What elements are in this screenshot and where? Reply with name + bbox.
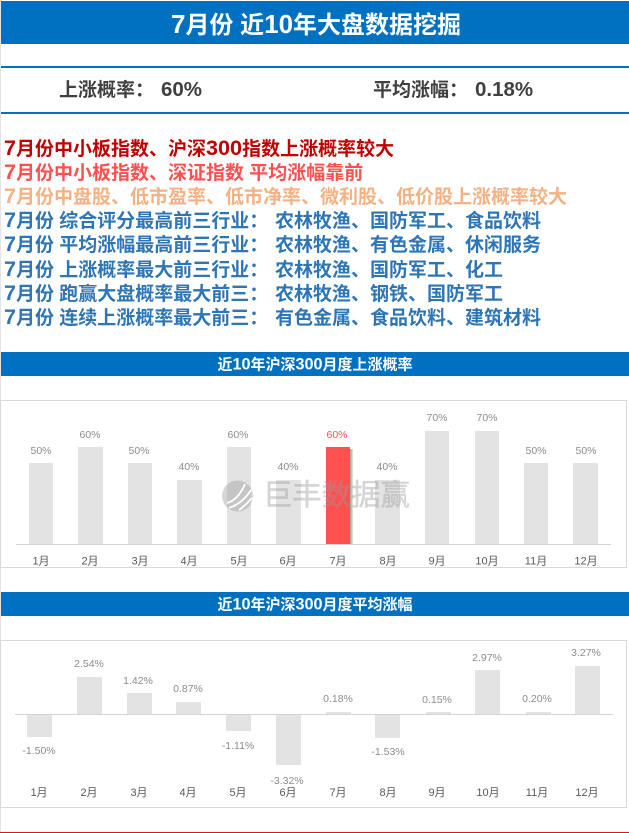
value labels: 0.20% [522,693,552,705]
bar chart: monthly average gain [0,640,626,808]
month labels: 5月 [230,556,248,568]
month labels: 5月 [229,787,247,799]
month labels: 2月 [80,787,98,799]
value labels: 50% [30,445,52,457]
value labels: 70% [476,412,498,424]
line: composite score: 7月份 综合评分最高前三行业： [4,207,268,232]
line: rise probability sectors: 农林牧渔、国防军工、化工 [275,258,503,281]
value labels: 0.87% [173,683,203,695]
month labels: 3月 [130,787,148,799]
month labels [32,556,598,568]
value labels: 1.42% [123,675,153,687]
value labels: 40% [178,461,200,473]
bar chart: monthly rise probability [0,400,626,568]
value labels: -1.11% [222,740,254,752]
month labels: 1月 [30,787,48,799]
line: average gain sectors: 农林牧渔、有色金属、休闲服务 [275,233,541,256]
month labels: 12月 [574,556,598,568]
value labels: -1.53% [371,746,405,758]
stat: rise probability: 60% [161,78,202,101]
value labels: 0.18% [323,693,353,705]
month labels [30,787,599,799]
value labels: 70% [426,412,448,424]
value labels: 60% [79,429,101,441]
month labels: 8月 [379,556,397,568]
section heading: monthly rise probability [1,352,629,376]
month labels: 12月 [575,787,599,799]
title banner [1,1,629,44]
month labels: 9月 [428,787,446,799]
line: average gain sectors: 7月份 平均涨幅最高前三行业： [4,231,268,256]
value labels: 3.27% [571,647,601,659]
line: small cap and CSI 300: 7月份中小板指数、沪深300指数上涨概率较大 [4,135,394,160]
month labels: 10月 [476,787,500,799]
line: rise probability sectors: 7月份 上涨概率最大前三行业： [4,256,268,281]
value labels: 0.15% [422,694,452,706]
value labels: -1.50% [22,745,56,757]
line: average gain leaders: 7月份中小板指数、深证指数 平均涨幅靠前 [4,159,363,184]
value labels: 2.54% [74,658,104,670]
section heading: monthly rise probability: 近10年沪深300月度上涨概率 [217,356,413,374]
month labels: 2月 [81,556,99,568]
value labels: 50% [525,445,547,457]
value labels: 40% [277,461,299,473]
line: consecutive rise probability: 有色金属、食品饮料、建筑材料 [275,306,541,329]
line: beat-market probability: 7月份 跑赢大盘概率最大前三： [4,280,268,305]
value labels: 50% [575,445,597,457]
value labels: 40% [376,461,398,473]
month labels: 9月 [428,556,446,568]
month labels: 3月 [131,556,149,568]
summary text block [4,135,567,329]
month labels: 1月 [32,556,50,568]
value labels: 60% [326,429,348,441]
month labels: 11月 [526,787,548,799]
section heading: monthly average gain [1,592,629,616]
month labels: 6月 [279,787,297,799]
line: consecutive rise probability: 7月份 连续上涨概率最大前三： [4,304,268,329]
month labels: 4月 [180,556,198,568]
line: style factors: 7月份中盘股、低市盈率、低市净率、微利股、低价股上涨概率较大 [4,183,567,208]
watermark: 巨丰数据赢 [263,479,410,512]
key stats band [1,66,629,114]
stat: rise probability: 上涨概率： [59,80,154,101]
value labels [22,647,601,787]
stat: average gain: 0.18% [475,78,533,101]
month labels: 7月 [329,787,347,799]
month labels: 6月 [279,556,297,568]
line: composite score: 农林牧渔、国防军工、食品饮料 [275,209,541,232]
value labels: -3.32% [270,775,304,787]
title banner: 7月份 近10年大盘数据挖掘 [171,9,461,39]
month labels: 8月 [379,787,397,799]
value labels: 60% [227,429,249,441]
line: beat-market probability: 农林牧渔、钢铁、国防军工 [275,282,503,305]
value labels: 50% [128,445,150,457]
highlighted bar: July [326,447,350,544]
month labels: 7月 [329,556,347,568]
month labels: 10月 [475,556,499,568]
stat: average gain: 平均涨幅： [373,80,468,101]
value labels [30,412,597,473]
value labels: 2.97% [472,652,502,664]
month labels: 4月 [179,787,197,799]
section heading: monthly average gain: 近10年沪深300月度平均涨幅 [217,596,413,614]
month labels: 11月 [525,556,547,568]
